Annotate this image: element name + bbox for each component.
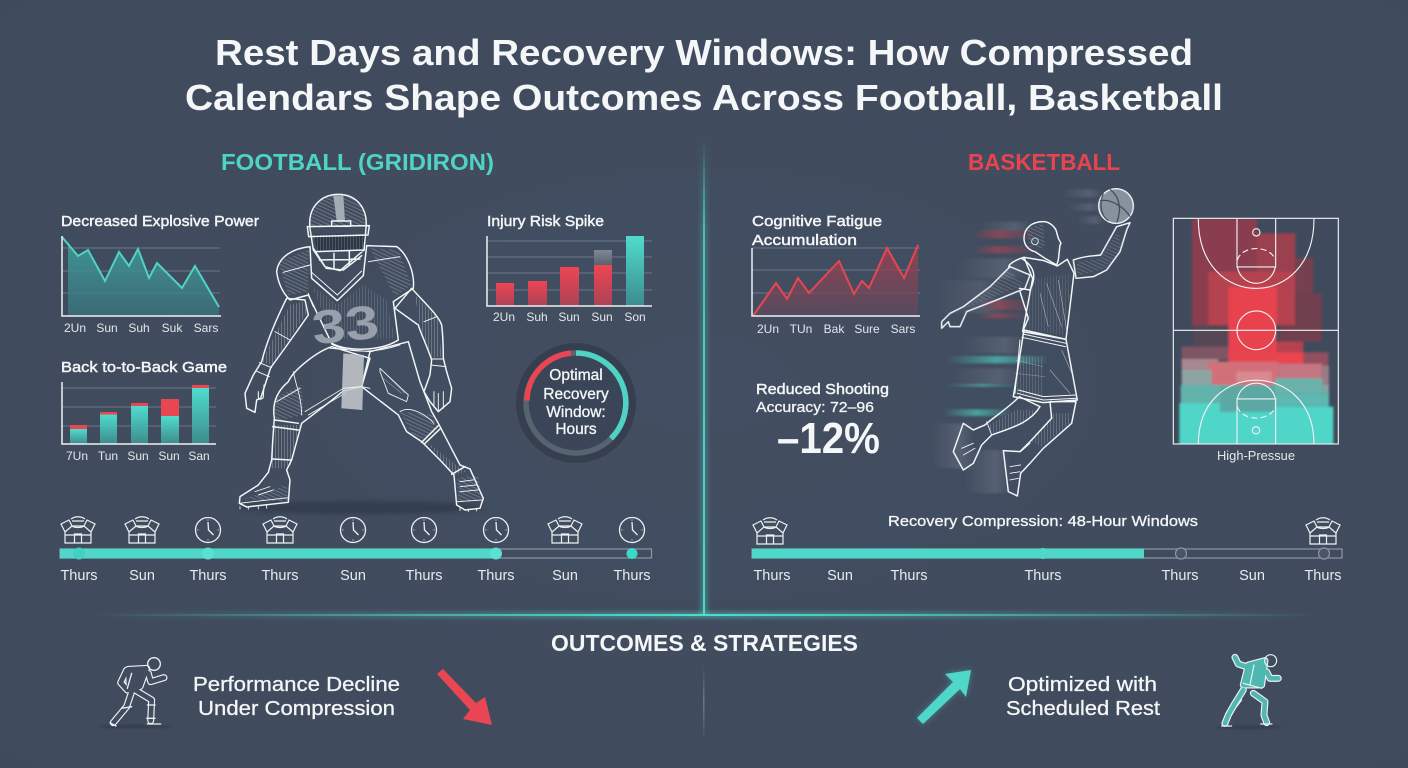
- text: optimized with rest: Scheduled Rest: [1006, 697, 1160, 720]
- chart: back to back game: Tun: [98, 449, 118, 463]
- text: performance decline: [193, 673, 400, 720]
- timeline: basketball schedule: Sun: [827, 568, 853, 584]
- chart: decreased explosive power: Suk: [162, 321, 183, 335]
- timeline: basketball schedule: Recovery Compression: 48-Hour Windows: [888, 513, 1198, 530]
- timeline: football schedule: Thurs: [261, 568, 299, 584]
- chart: back to back game: 7Un: [66, 449, 88, 463]
- gauge: optimal recovery window: Optimal: [549, 367, 603, 384]
- chart: decreased explosive power: [61, 213, 259, 335]
- illustration: basketball player: [930, 189, 1133, 496]
- timeline: football schedule: Sun: [552, 568, 578, 584]
- gauge: optimal recovery window: Window:: [546, 404, 606, 421]
- gauge: optimal recovery window: Recovery: [543, 386, 609, 403]
- illustration: football player: [237, 194, 483, 514]
- arms: [245, 298, 308, 412]
- icon: rested athlete: [1215, 655, 1282, 729]
- chart: cognitive fatigue: Cognitive Fatigue: [752, 213, 882, 230]
- chart: back to back game: [61, 359, 227, 463]
- timeline: football schedule: Thurs: [477, 568, 515, 584]
- heading: outcomes: OUTCOMES & STRATEGIES: [551, 630, 858, 656]
- timeline: basketball schedule: Thurs: [1161, 568, 1199, 584]
- heading: basketball: BASKETBALL: [968, 149, 1120, 175]
- chart: back to back game: San: [188, 449, 210, 463]
- timeline: football schedule: Thurs: [60, 568, 98, 584]
- chart: court heat map: [1173, 218, 1338, 445]
- text: optimized with rest: Optimized with: [1008, 673, 1157, 696]
- chart: cognitive fatigue: Bak: [824, 322, 845, 336]
- chart: decreased explosive power: Suh: [128, 321, 150, 335]
- chart: cognitive fatigue: TUn: [790, 322, 812, 336]
- timeline: football schedule: Sun: [340, 568, 366, 584]
- timeline: basketball schedule: Thurs: [890, 568, 928, 584]
- panel: outcomes and strategies: [98, 630, 1282, 729]
- timeline: basketball schedule: Thurs: [1024, 568, 1062, 584]
- stat: reduced shooting accuracy: Reduced Shooting: [756, 381, 889, 398]
- chart: injury risk spike: Son: [624, 310, 646, 324]
- stat: reduced shooting accuracy: –12%: [777, 414, 880, 463]
- timeline: football schedule: Thurs: [405, 568, 443, 584]
- icon: fatigued runner: [98, 658, 172, 729]
- chart: cognitive fatigue: Accumulation: [752, 232, 857, 249]
- chart: decreased explosive power: Decreased Explosive Power: [61, 213, 259, 230]
- torso: [277, 246, 414, 349]
- chart: injury risk spike: Injury Risk Spike: [487, 213, 604, 230]
- chart: injury risk spike: Sun: [558, 310, 580, 324]
- court label: High-Pressue: [1217, 449, 1295, 463]
- timeline: football schedule: Thurs: [613, 568, 651, 584]
- panel: basketball: [752, 149, 1342, 584]
- chart: injury risk spike: Suh: [526, 310, 548, 324]
- text: performance decline: Performance Decline: [193, 673, 400, 696]
- chart: injury risk spike: [487, 213, 652, 324]
- chart: decreased explosive power: 2Un: [64, 321, 86, 335]
- timeline: football schedule: [60, 517, 652, 584]
- text: optimized with rest: [1006, 673, 1160, 720]
- right leg: [362, 342, 483, 510]
- timeline: football schedule: Thurs: [189, 568, 227, 584]
- chart: cognitive fatigue: Sars: [891, 322, 915, 336]
- text: performance decline: Under Compression: [198, 697, 395, 720]
- timeline: basketball schedule: Thurs: [753, 568, 791, 584]
- arrow: improvement: [917, 670, 971, 724]
- arrow: decline: [437, 669, 492, 725]
- timeline: football schedule: Sun: [129, 568, 155, 584]
- panel: football: [60, 149, 652, 584]
- stat: reduced shooting accuracy: Accuracy: 72–96: [756, 399, 874, 416]
- pale towel: [341, 353, 364, 410]
- gauge: optimal recovery window: Hours: [555, 421, 597, 438]
- chart: injury risk spike: 2Un: [493, 310, 515, 324]
- stat: reduced shooting accuracy: [756, 381, 889, 463]
- title: Calendars Shape Outcomes Across Football, Basketball: [185, 77, 1223, 118]
- helmet: [310, 194, 366, 271]
- title: [185, 32, 1223, 118]
- chart: cognitive fatigue: 2Un: [757, 322, 779, 336]
- chart: decreased explosive power: Sars: [194, 321, 218, 335]
- shoes: [243, 475, 482, 502]
- timeline: basketball schedule: Thurs: [1304, 568, 1342, 584]
- chart: injury risk spike: Sun: [591, 310, 613, 324]
- chart: back to back game: Back to-to-Back Game: [61, 359, 227, 376]
- chart: cognitive fatigue: [752, 213, 920, 336]
- timeline: basketball schedule: [752, 513, 1342, 584]
- timeline: basketball schedule: Sun: [1239, 568, 1265, 584]
- chart: back to back game: Sun: [158, 449, 180, 463]
- left leg: [239, 347, 370, 507]
- number: 33: [309, 296, 381, 355]
- central divider: [90, 140, 1320, 742]
- chart: back to back game: Sun: [127, 449, 149, 463]
- chart: decreased explosive power: Sun: [96, 321, 118, 335]
- gauge: optimal recovery window: [516, 343, 636, 463]
- chart: cognitive fatigue: Sure: [854, 322, 880, 336]
- heading: football: FOOTBALL (GRIDIRON): [221, 149, 494, 175]
- title: Rest Days and Recovery Windows: How Compressed: [215, 32, 1193, 73]
